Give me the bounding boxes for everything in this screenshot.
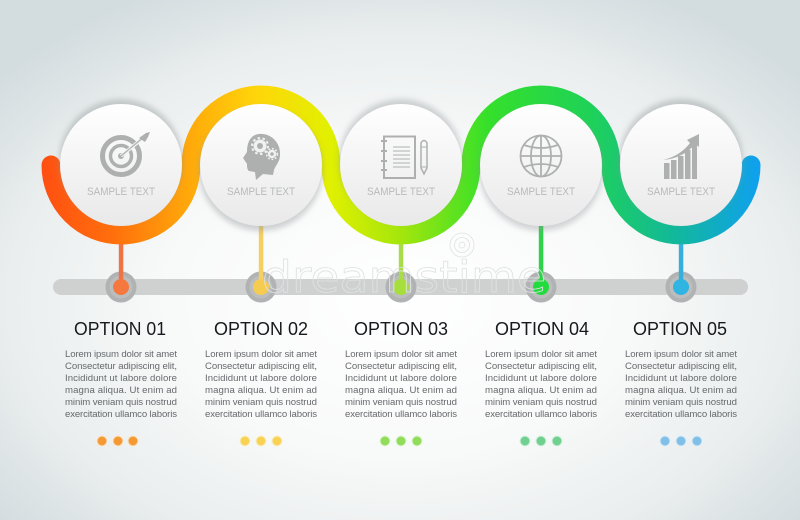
option 01: Consectetur adipiscing elit,	[65, 361, 177, 372]
circle 4: globe	[479, 104, 603, 231]
node 1	[106, 244, 136, 302]
option 05: OPTION 05	[633, 319, 727, 339]
option 05	[625, 319, 737, 420]
option 05: Consectetur adipiscing elit,	[625, 361, 737, 372]
icon: target	[102, 132, 150, 174]
circle 1: target	[59, 99, 183, 226]
circle 5: growth chart	[619, 99, 743, 226]
option 02	[205, 319, 317, 420]
option 04: Incididunt ut labore dolore	[485, 373, 597, 384]
circle 4: globe: SAMPLE TEXT	[507, 186, 575, 198]
dots: blue	[660, 436, 702, 446]
option 03: Consectetur adipiscing elit,	[345, 361, 457, 372]
option 04: OPTION 04	[495, 319, 589, 339]
node 3	[386, 244, 416, 302]
circle 1: target: SAMPLE TEXT	[87, 186, 155, 198]
circle 5: growth chart: SAMPLE TEXT	[647, 186, 715, 198]
option 05: minim veniam quis nostrud	[625, 397, 737, 408]
node 4	[526, 224, 556, 302]
option 02: Lorem ipsum dolor sit amet	[205, 349, 317, 360]
option 05: exercitation ullamco laboris	[625, 409, 737, 420]
option 02: exercitation ullamco laboris	[205, 409, 317, 420]
circle 3: notebook: SAMPLE TEXT	[367, 186, 435, 198]
circle 2: head	[199, 104, 323, 231]
option 01: minim veniam quis nostrud	[65, 397, 177, 408]
option 01: exercitation ullamco laboris	[65, 409, 177, 420]
node 5	[666, 244, 696, 302]
icon: head with gears	[243, 134, 280, 180]
node 2	[246, 224, 276, 302]
option 02: Consectetur adipiscing elit,	[205, 361, 317, 372]
option 04: Consectetur adipiscing elit,	[485, 361, 597, 372]
watermark: dreamstime	[262, 252, 546, 303]
option 03: magna aliqua. Ut enim ad	[345, 385, 457, 396]
option 01	[65, 319, 177, 420]
option 02: magna aliqua. Ut enim ad	[205, 385, 317, 396]
dots: yellow	[240, 436, 282, 446]
option 03: exercitation ullamco laboris	[345, 409, 457, 420]
dots: green	[520, 436, 562, 446]
option 03: minim veniam quis nostrud	[345, 397, 457, 408]
option 03	[345, 319, 457, 420]
option 03: Incididunt ut labore dolore	[345, 373, 457, 384]
option 05: Lorem ipsum dolor sit amet	[625, 349, 737, 360]
option 01: Incididunt ut labore dolore	[65, 373, 177, 384]
timeline bar	[53, 279, 748, 295]
option 04: magna aliqua. Ut enim ad	[485, 385, 597, 396]
option 02: Incididunt ut labore dolore	[205, 373, 317, 384]
option 01: magna aliqua. Ut enim ad	[65, 385, 177, 396]
option 05: Incididunt ut labore dolore	[625, 373, 737, 384]
dots: orange	[97, 436, 138, 446]
option 01: OPTION 01	[74, 319, 166, 339]
option 02: minim veniam quis nostrud	[205, 397, 317, 408]
icon: globe	[520, 136, 562, 176]
circle 3: notebook	[339, 99, 463, 226]
ribbon: wavy gradient band	[51, 95, 751, 235]
circle 2: head: SAMPLE TEXT	[227, 186, 295, 198]
option 01: Lorem ipsum dolor sit amet	[65, 349, 177, 360]
icon: notebook and pencil	[381, 136, 427, 178]
watermark	[262, 233, 546, 303]
option 02: OPTION 02	[214, 319, 308, 339]
option 04	[485, 319, 597, 420]
option 03: OPTION 03	[354, 319, 448, 339]
option 05: magna aliqua. Ut enim ad	[625, 385, 737, 396]
option 04: minim veniam quis nostrud	[485, 397, 597, 408]
option 04: exercitation ullamco laboris	[485, 409, 597, 420]
icon: bar chart with arrow	[663, 134, 699, 179]
option 03: Lorem ipsum dolor sit amet	[345, 349, 457, 360]
option 04: Lorem ipsum dolor sit amet	[485, 349, 597, 360]
dots: light green	[380, 436, 422, 446]
